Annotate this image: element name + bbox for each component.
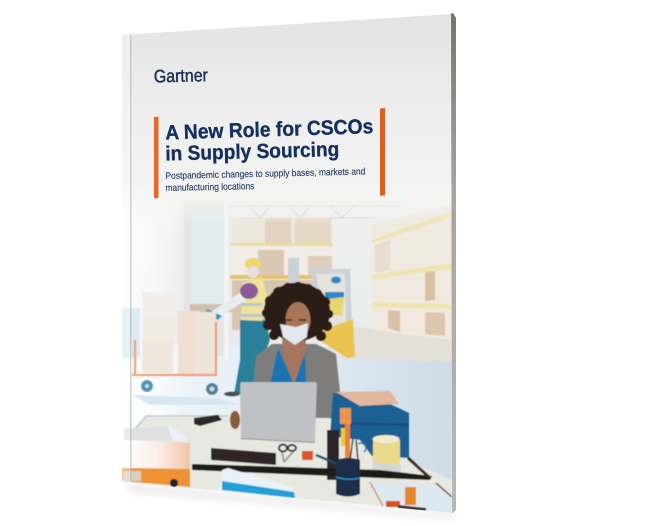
clipboard at bottom right xyxy=(370,482,452,513)
pens and pencils in holder xyxy=(327,408,366,480)
orange cutter xyxy=(386,487,426,511)
woman at desk xyxy=(252,281,340,419)
scissors xyxy=(279,444,296,462)
phone xyxy=(194,415,222,426)
Gartner logo: Gartner xyxy=(154,65,208,86)
eyes xyxy=(285,319,306,321)
title line 2: in Supply Sourcing xyxy=(165,138,340,165)
tape roll xyxy=(372,435,401,473)
subtitle xyxy=(165,166,366,194)
book mockup illustration xyxy=(122,13,456,518)
title xyxy=(165,115,374,165)
subtitle line 1: Postpandemic changes to supply bases, markets and xyxy=(165,166,366,182)
left orange bar xyxy=(154,117,158,198)
blue storage box xyxy=(330,391,409,458)
jacket xyxy=(252,343,340,419)
binder ring hole xyxy=(170,479,178,487)
right racks with boxes xyxy=(372,205,452,340)
desk scene xyxy=(122,382,452,513)
worker in safety vest xyxy=(206,258,270,396)
desk papers on left xyxy=(124,428,170,438)
black desk edge xyxy=(192,464,432,480)
hand and bracelet xyxy=(230,411,240,429)
shirt xyxy=(270,348,306,384)
left fold crease xyxy=(130,30,132,480)
sharpener and marker xyxy=(302,451,340,465)
hair xyxy=(262,282,333,341)
blue folder under desk xyxy=(220,468,295,498)
peach box at left xyxy=(122,440,190,469)
neck xyxy=(282,338,306,384)
binder label xyxy=(123,471,141,481)
right orange bar xyxy=(380,108,385,196)
warehouse floor xyxy=(168,344,452,480)
forklift xyxy=(288,258,355,358)
book shadow xyxy=(124,484,454,519)
subtitle line 2: manufacturing locations xyxy=(165,181,255,194)
cover paper xyxy=(122,14,452,464)
orange binder xyxy=(122,468,190,487)
face mask xyxy=(280,323,308,345)
desk surface xyxy=(122,416,452,513)
door frame on left xyxy=(184,212,232,360)
black pencil case xyxy=(211,448,276,465)
cart with boxes xyxy=(132,292,240,405)
pen holder xyxy=(336,458,360,496)
glass desk edge xyxy=(136,416,228,428)
warehouse back wall xyxy=(174,265,372,345)
laptop xyxy=(240,382,317,443)
middle shelves with boxes xyxy=(230,218,333,330)
face xyxy=(286,302,310,338)
left side fade xyxy=(122,212,164,438)
desk frame at right xyxy=(408,458,430,478)
top photo fade xyxy=(184,185,452,220)
title line 1: A New Role for CSCOs xyxy=(165,115,374,144)
warehouse photo xyxy=(120,185,455,480)
left strip highlight xyxy=(122,30,130,490)
book cover xyxy=(120,10,455,520)
tissue on desk xyxy=(168,425,187,442)
beige floor at right xyxy=(340,325,452,362)
book spine edge xyxy=(450,13,456,514)
warehouse ceiling trusses xyxy=(230,206,400,218)
pale blue panel at far left xyxy=(122,308,140,358)
